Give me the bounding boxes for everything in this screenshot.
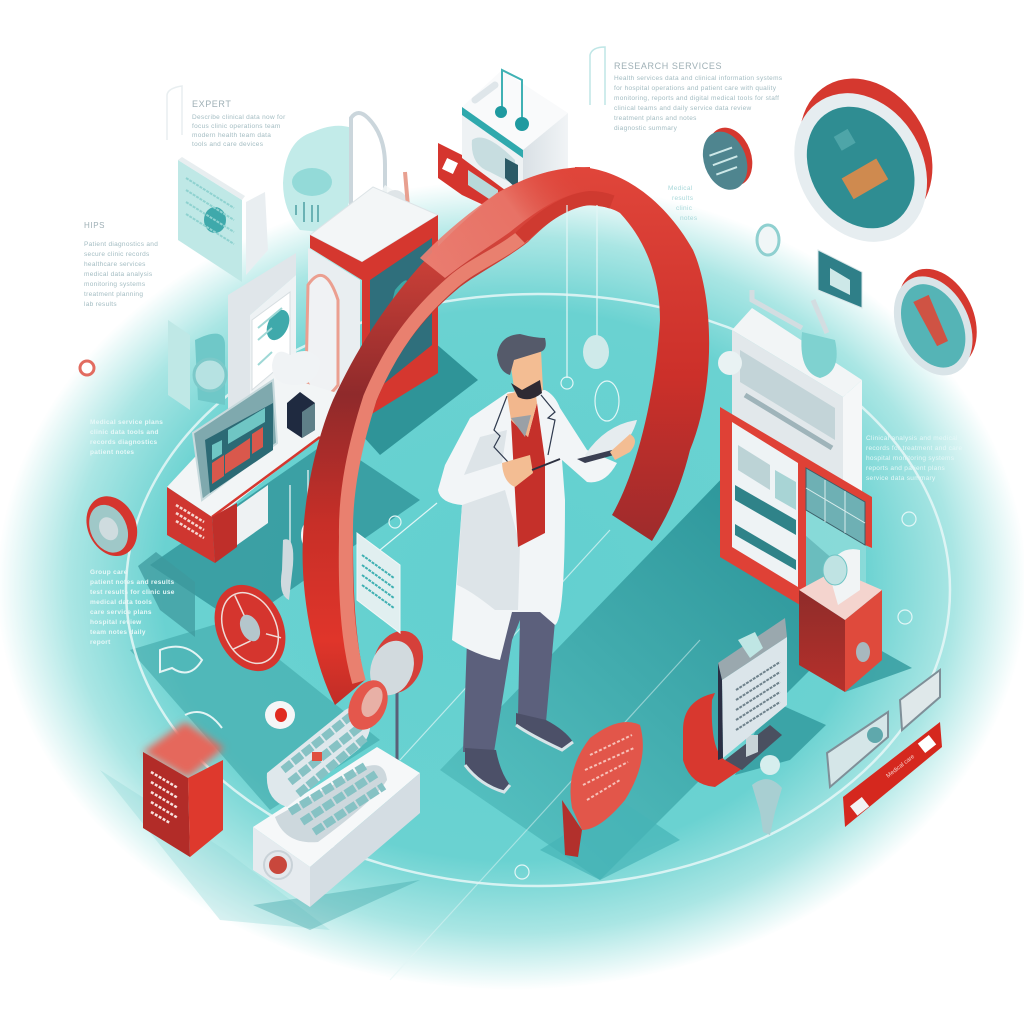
red ball and ring on arch foot [341,624,431,736]
white computer unit [168,253,296,420]
text block: upper left floor: clinic data tools and [90,429,159,436]
keypad [275,765,387,842]
text block: right: reports and patient plans [866,465,945,472]
white machine [253,657,420,907]
red framed panel [720,407,872,640]
red curved seat [683,693,743,787]
beard [511,380,542,399]
bottom right cards: Medical care [886,753,917,780]
text block: left: treatment planning [84,291,143,298]
text block: left: Patient diagnostics and [84,241,158,248]
coat shading [457,430,520,610]
top cube device [462,70,568,245]
text block: right: records for treatment and care [866,445,963,452]
red cabinet [306,187,438,420]
text block: left: lab results [84,301,117,308]
lapels [494,395,555,462]
arch salmon top face [420,167,590,278]
desk with screen [167,351,337,563]
text block: below top right: notes [680,215,698,222]
text block: top left [167,86,286,148]
vest [511,403,545,547]
text block: top left: EXPERT [192,99,231,109]
text block: upper left floor: Medical service plans [90,419,163,426]
small red rim badge [694,121,761,196]
text block: top left: tools and care devices [192,141,264,148]
tiny red ring top left [80,361,94,375]
text block: top right: diagnostic summary [614,125,678,132]
text block: right: hospital monitoring systems [866,455,955,462]
text block: lower left floor: care service plans [90,609,152,616]
lab stand on cabinet [351,113,410,245]
small figure [752,755,782,835]
text block: lower left floor [90,569,175,646]
text block: top right [590,47,783,132]
hair [497,334,546,375]
teal radial disc [0,180,1024,990]
neck and undershirt [507,388,537,437]
cover [267,707,370,807]
text block: top right: clinical teams and daily service data review [614,105,751,112]
teal ring icon [757,225,779,255]
text block: lower left floor: patient notes and results [90,579,175,586]
floor shadows [100,330,912,930]
flask dome [283,126,352,233]
red box with dial [799,549,882,692]
text block: right [866,435,963,482]
glass note card [357,533,400,633]
bottom right cards [827,670,942,827]
text block: left: HIPS [84,221,105,230]
small white ring target [265,701,295,729]
text block: top left: Describe clinical data now for [192,114,286,121]
red tag top [438,143,505,215]
head [510,350,543,398]
text block: left: monitoring systems [84,281,146,288]
hanging lines and beads [380,205,916,980]
small red badge left [77,488,147,564]
text block: upper left floor: patient notes [90,449,134,456]
text block: lower left floor: medical data tools [90,599,152,606]
arch inner top edge [520,198,612,238]
text block: right: Clinical analysis and medical [866,435,958,442]
monitor [683,618,787,787]
text block: upper left floor [90,419,163,456]
text block: left: medical data analysis [84,271,153,278]
slim white post [246,192,268,275]
text block: below top right [668,185,698,222]
hand and pen [502,455,533,487]
text block: top right: monitoring, reports and digital medical tools for staff [614,95,779,102]
teal icon card [818,250,862,308]
arch right leg [575,167,709,541]
orbit ring [126,294,950,886]
big round badge top right [763,54,964,266]
text block: top left: modern health team data [192,132,271,139]
text block: left: secure clinic records [84,251,150,258]
left glass panel [178,157,245,282]
text block: top right: RESEARCH SERVICES [614,61,722,71]
tablet [585,420,637,460]
doctor [438,334,637,792]
red box bottom left [143,722,224,857]
arch left band [303,167,590,705]
text block: lower left floor: team notes daily [90,629,146,636]
text block: top left: focus clinic operations team [192,123,281,130]
shoes [465,748,510,792]
text block: top right: for hospital operations and patient care with quality [614,85,777,92]
text block: right: service data summary [866,475,936,482]
text block: left [84,221,158,308]
text block: left: healthcare services [84,261,146,268]
hanging devices under desk [281,470,313,600]
text block: top right: Health services data and clinical information systems [614,75,783,82]
text block: lower left floor: hospital review [90,619,142,626]
text block: lower left floor: Group care [90,569,128,576]
right server unit [718,290,862,520]
text block: lower left floor: test results for clinic use [90,589,175,596]
right round badge [876,256,994,388]
red dial [201,573,299,683]
text block: below top right: Medical [668,185,693,192]
legs [463,600,556,752]
red arch [303,167,709,705]
glass card lower left [138,552,222,728]
text block: below top right: results [672,195,694,202]
red speech oval [562,722,643,857]
text block: lower left floor: report [90,639,111,646]
arch inner highlight [346,235,524,682]
text block: top right: treatment plans and notes [614,115,697,122]
coat [438,390,617,660]
text block: below top right: clinic [676,205,693,212]
text block: upper left floor: records diagnostics [90,439,158,446]
